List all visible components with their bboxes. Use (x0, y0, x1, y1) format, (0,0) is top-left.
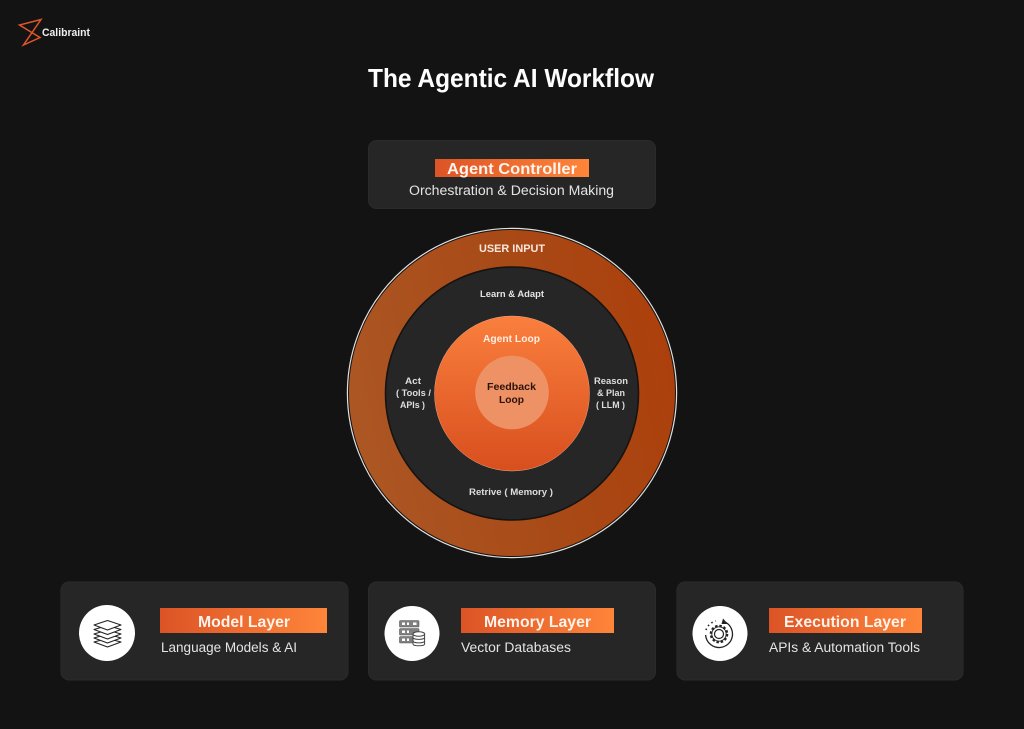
step: reason and plan: ( LLM ) (596, 400, 625, 411)
centre circle: feedback loop: Loop (499, 394, 524, 406)
icon: server and database (384, 606, 440, 661)
icon: gear with circular arrow (692, 606, 748, 661)
step: learn and adapt: Learn & Adapt (480, 289, 545, 300)
heading bar: agent controller: Agent Controller (447, 161, 577, 178)
logo wordmark: Calibraint (42, 27, 90, 39)
step: act (396, 376, 431, 411)
panel: agent controller (368, 140, 656, 208)
title: The Agentic AI Workflow (368, 63, 655, 93)
outer ring: user input (347, 228, 677, 558)
heading bar: execution layer (769, 608, 922, 633)
step: reason and plan: Reason (594, 376, 628, 387)
panel: model layer (61, 582, 348, 680)
icon: Z logo mark (20, 20, 41, 45)
outer ring: user input: USER INPUT (479, 243, 545, 255)
logo: Calibraint (20, 20, 90, 45)
subtitle: language models: Language Models & AI (161, 640, 297, 655)
middle ring: workflow steps (386, 267, 638, 520)
step: act: ( Tools / (396, 388, 431, 399)
inner circle: agent loop (434, 316, 590, 471)
step: act: Act (405, 376, 422, 387)
panel: execution layer (677, 582, 963, 680)
centre circle: feedback loop: Feedback (487, 381, 536, 393)
step: retrieve memory: Retrive ( Memory ) (469, 487, 553, 498)
step: reason and plan: & Plan (597, 388, 625, 399)
heading bar: memory layer (461, 608, 614, 633)
subtitle: orchestration: Orchestration & Decision Making (409, 183, 614, 198)
heading bar: execution layer: Execution Layer (784, 614, 906, 631)
concentric workflow diagram (347, 228, 677, 558)
step: reason and plan (594, 376, 628, 411)
heading bar: memory layer: Memory Layer (484, 614, 591, 631)
centre circle: feedback loop (475, 356, 549, 429)
subtitle: apis and automation: APIs & Automation Tools (769, 640, 920, 655)
icon: stacked layers (79, 605, 135, 661)
subtitle: vector databases: Vector Databases (461, 640, 571, 655)
panel: memory layer (368, 582, 656, 680)
inner circle: agent loop: Agent Loop (483, 333, 540, 345)
heading bar: model layer: Model Layer (198, 614, 290, 631)
heading bar: model layer (160, 608, 327, 633)
step: act: APIs ) (400, 400, 425, 411)
